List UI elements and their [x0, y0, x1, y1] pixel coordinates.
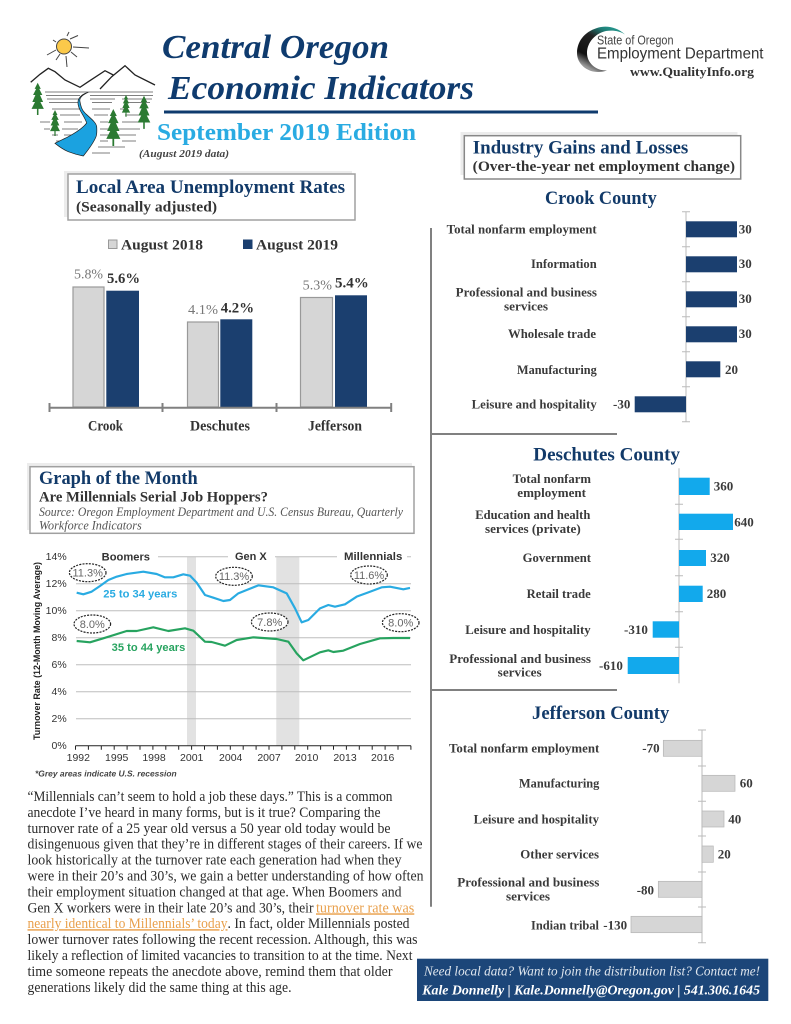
y axis labels: 2% — [52, 713, 67, 725]
category labels: Indian tribal — [531, 918, 600, 932]
values — [599, 478, 754, 673]
x axis — [76, 746, 411, 750]
logo: State of Oregon Employment Department: State of Oregon — [597, 34, 674, 48]
x axis labels: 2007 — [257, 752, 281, 764]
article text: disingenuous given that they’re in different stages of their careers. If we — [28, 837, 422, 853]
category labels: Education and health — [475, 508, 590, 522]
category labels — [88, 419, 362, 435]
bars: Deschutes — [188, 301, 254, 407]
bars: Jefferson: 5.4% — [335, 276, 369, 292]
panel heading: Graph of the Month — [27, 463, 414, 533]
bar chart: unemployment rates — [49, 238, 392, 435]
category labels: Retail trade — [527, 587, 591, 601]
category labels: Jefferson — [308, 419, 362, 435]
panel heading: Local Area Unemployment Rates — [64, 171, 355, 220]
axis — [49, 403, 392, 412]
panel heading: Local Area Unemployment Rates: (Seasonally adjusted) — [76, 200, 217, 216]
y axis labels: 0% — [52, 740, 67, 752]
callouts: dashed ellipses: 8.0% — [80, 619, 105, 631]
category labels: Professional and business — [449, 652, 591, 666]
axis — [682, 212, 690, 422]
category labels: Total nonfarm — [513, 472, 592, 486]
values: 320 — [710, 550, 730, 565]
icon: mountains — [31, 66, 155, 89]
article text: lower turnover rates following the recent recession. Although, this was — [28, 932, 418, 948]
callouts: dashed ellipses: 11.3% — [219, 571, 249, 583]
article text: look historically at the turnover rate each generation had when they — [28, 853, 402, 869]
bars: Crook: 5.8% — [74, 267, 103, 282]
article text: anecdote I’ve heard in many forms, but is it true? Comparing the — [28, 805, 380, 821]
article text: were in their 20’s and 30’s, we gain a better understanding of how often — [28, 868, 424, 884]
bars: Crook: 5.6% — [107, 271, 140, 287]
bars: Deschutes: 4.2% — [221, 301, 254, 317]
title — [162, 29, 474, 107]
callouts: dashed ellipses: 8.0% — [388, 618, 413, 630]
category labels: Total nonfarm employment — [449, 741, 600, 755]
panel heading: Industry Gains and Losses — [460, 132, 741, 179]
values: -610 — [599, 658, 623, 673]
y axis title: Turnover Rate (12-Month Moving Average) — [32, 562, 43, 740]
article text: nearly identical to Millennials’ today — [28, 916, 228, 932]
y axis labels: 12% — [46, 578, 67, 590]
y axis labels: 8% — [52, 632, 67, 644]
generation labels: Gen X — [235, 551, 267, 563]
category labels: services — [506, 890, 550, 904]
category labels: services — [498, 666, 542, 680]
x axis labels: 1992 — [67, 752, 90, 764]
values: 30 — [739, 291, 752, 306]
bars: Deschutes: 4.1% — [188, 302, 218, 317]
panel heading: Local Area Unemployment Rates: Local Area Unemployment Rates — [76, 177, 345, 198]
generation labels: Millennials — [344, 551, 402, 563]
values: -310 — [624, 622, 648, 637]
category labels: Manufacturing — [519, 777, 600, 791]
contact banner — [417, 959, 768, 1001]
values: 360 — [714, 478, 733, 493]
contact banner: Need local data? Want to join the distribution list? Contact me! — [423, 963, 760, 978]
y axis labels: 14% — [46, 551, 67, 563]
series label: 25 to 34 years: 25 to 34 years — [103, 588, 177, 600]
y axis labels: 6% — [52, 659, 67, 671]
panel heading: Graph of the Month: Graph of the Month — [39, 468, 198, 489]
callouts: dashed ellipses: 7.8% — [257, 617, 282, 629]
generation labels: Boomers — [102, 552, 150, 564]
values: -70 — [642, 740, 660, 755]
logo: sun, mountains, river and trees — [31, 32, 155, 156]
category labels: Manufacturing — [517, 363, 597, 377]
category labels: Professional and business — [456, 285, 597, 299]
bars — [631, 740, 735, 933]
article text: . In fact, older Millennials posted — [228, 916, 410, 932]
recession bands — [187, 557, 299, 746]
panel: Crook County — [447, 188, 752, 422]
category labels: Government — [523, 551, 592, 565]
legend: August 2018 — [121, 238, 203, 254]
panel: Deschutes County — [449, 445, 754, 683]
x axis labels: 1998 — [142, 752, 166, 764]
generation labels — [102, 551, 402, 564]
category labels: Leisure and hospitality — [474, 812, 600, 826]
line: 35 to 44 years — [77, 627, 410, 660]
logo: State of Oregon Employment Department — [577, 27, 764, 79]
category labels: Leisure and hospitality — [465, 623, 591, 637]
frame lines between counties — [431, 228, 617, 907]
icon: swoosh — [577, 27, 625, 72]
article text: their employment situation changed at that age. When Boomers and — [28, 884, 402, 900]
values: 60 — [740, 776, 753, 791]
category labels: Total nonfarm employment — [447, 222, 598, 236]
data date: (August 2019 data) — [139, 149, 229, 160]
icon: sun — [47, 32, 89, 67]
category labels: Crook — [88, 419, 124, 435]
title: Economic Indicators — [167, 70, 474, 107]
x axis labels: 2016 — [371, 752, 395, 764]
values: 30 — [739, 326, 752, 341]
land lines — [40, 92, 153, 153]
category labels: Wholesale trade — [508, 327, 596, 341]
category labels: services (private) — [485, 522, 581, 536]
icon: river — [55, 92, 97, 156]
line chart: turnover rate — [32, 551, 419, 779]
x axis labels: 2001 — [180, 752, 204, 764]
values: -80 — [637, 882, 654, 897]
panel heading: Graph of the Month: Are Millennials Serial Job Hoppers? — [39, 489, 268, 505]
callouts: dashed ellipses: 11.6% — [354, 570, 384, 582]
category labels: Deschutes — [190, 419, 250, 435]
x axis labels: 2013 — [333, 752, 357, 764]
icon: trees — [32, 83, 150, 146]
x axis labels — [67, 752, 395, 764]
logo: State of Oregon Employment Department: Employment Department — [597, 46, 764, 62]
values: 40 — [728, 811, 741, 826]
bars — [628, 478, 733, 674]
category labels: services — [504, 299, 548, 313]
values — [603, 740, 753, 932]
values: 20 — [718, 847, 731, 862]
y axis labels — [46, 551, 67, 752]
category labels — [449, 472, 592, 680]
bars — [635, 221, 737, 412]
callouts: dashed ellipses — [69, 564, 419, 633]
panel: Jefferson County — [449, 703, 753, 943]
y axis labels: 4% — [52, 686, 67, 698]
values: 20 — [725, 362, 738, 377]
y axis labels: 10% — [46, 605, 67, 617]
values: -30 — [613, 397, 630, 412]
x axis labels: 2004 — [219, 752, 243, 764]
axis — [698, 730, 706, 943]
category labels: Leisure and hospitality — [472, 398, 597, 412]
callouts: dashed ellipses: 11.3% — [73, 568, 103, 580]
values: 30 — [739, 221, 752, 236]
line: 25 to 34 years — [77, 572, 410, 622]
category labels — [447, 222, 598, 412]
values — [613, 221, 752, 412]
article text: likely a reflection of limited vacancies to transition to at the time. Next — [28, 948, 412, 964]
x axis labels: 1995 — [105, 752, 129, 764]
legend — [108, 238, 338, 254]
article text: turnover rate of a 25 year old versus a 50 year old today would be — [28, 821, 390, 837]
category labels: Information — [531, 257, 597, 271]
article text: time someone repeats the anecdote above, remind them that older — [28, 964, 393, 980]
category labels — [449, 741, 600, 932]
gridlines — [76, 557, 411, 719]
article text: generations likely did the same thing at this age. — [28, 980, 292, 996]
bars: Jefferson — [300, 276, 369, 407]
bars: Jefferson: 5.3% — [303, 277, 332, 292]
article text: turnover rate was — [316, 900, 415, 916]
category labels: Professional and business — [457, 875, 599, 889]
panel heading: Industry Gains and Losses: (Over-the-year net employment change) — [473, 159, 735, 175]
category labels: employment — [517, 486, 587, 500]
panel heading: Graph of the Month: Source: Oregon Employment Department and U.S. Census Bureau, Quarterly — [39, 505, 403, 519]
title: Central Oregon — [162, 29, 389, 66]
values: 30 — [739, 256, 752, 271]
heading: Crook County — [545, 188, 657, 209]
heading: Jefferson County — [532, 703, 670, 724]
x axis labels: 2010 — [295, 752, 319, 764]
article text — [28, 789, 424, 996]
panel heading: Graph of the Month: Workforce Indicators — [39, 518, 142, 532]
article text: Gen X workers were in their late 20’s and 30’s, their — [28, 900, 314, 916]
panel heading: Industry Gains and Losses: Industry Gains and Losses — [473, 137, 688, 158]
chart note: *Grey areas indicate U.S. recession — [35, 769, 177, 779]
contact banner: Kale Donnelly | Kale.Donnelly@Oregon.gov | 541.306.1645 — [421, 982, 760, 997]
bars: Crook — [73, 267, 140, 407]
category labels: Other services — [520, 848, 599, 862]
logo: State of Oregon Employment Department: www.QualityInfo.org — [630, 64, 755, 79]
article text: “Millennials can’t seem to hold a job these days.” This is a common — [28, 789, 393, 805]
legend: August 2019 — [256, 238, 338, 254]
values: 280 — [707, 586, 726, 601]
values: 640 — [734, 514, 754, 529]
axis — [675, 468, 683, 683]
edition heading: September 2019 Edition — [157, 120, 416, 146]
values: -130 — [603, 917, 627, 932]
series label: 35 to 44 years: 35 to 44 years — [112, 642, 185, 654]
heading: Deschutes County — [533, 445, 681, 466]
